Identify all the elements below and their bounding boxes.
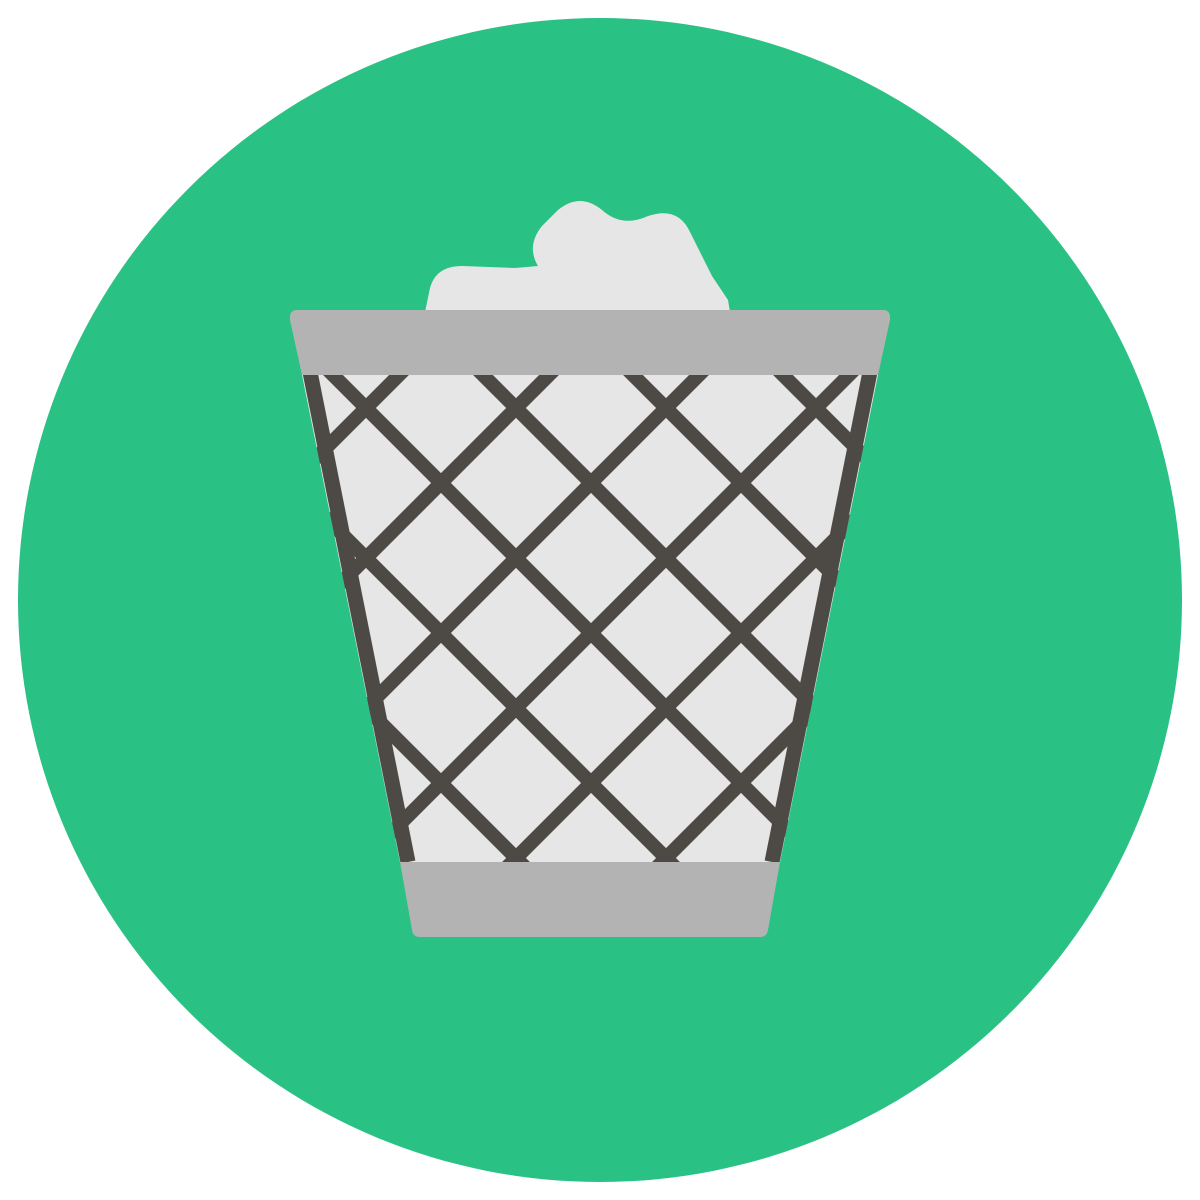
mesh	[316, 375, 864, 862]
top rim	[290, 310, 890, 375]
basket body	[302, 375, 878, 862]
icon: trash basket	[290, 201, 890, 937]
paper crumpled	[425, 201, 730, 312]
bottom band	[400, 862, 780, 937]
side frame	[310, 372, 408, 862]
